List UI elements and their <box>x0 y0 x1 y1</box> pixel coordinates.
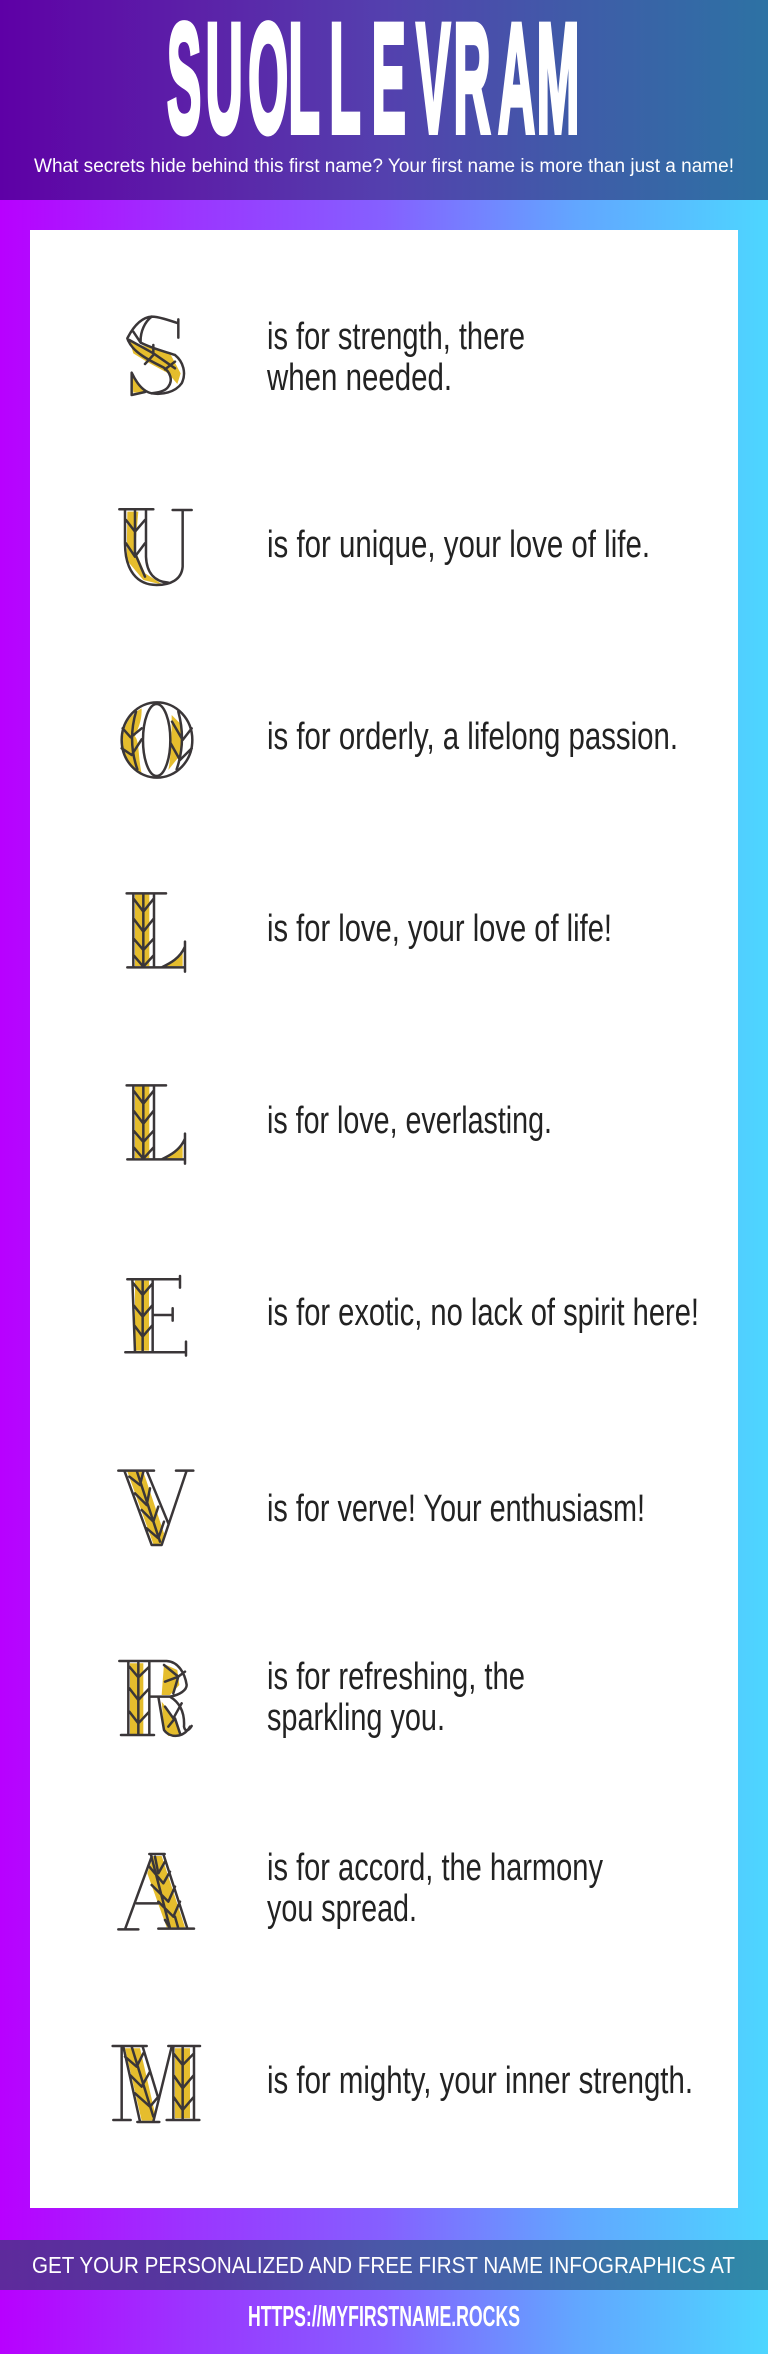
icon: letter E <box>125 1276 186 1356</box>
row: second L <box>127 1085 552 1164</box>
icon: letter U <box>119 509 192 585</box>
row: S <box>127 316 525 399</box>
subtitle: What secrets hide behind this first name? Your first name is more than just a name! <box>34 156 734 177</box>
text: U: is for unique, your love of life. <box>267 524 650 566</box>
row: L <box>127 893 612 972</box>
text: R line 2: sparkling you. <box>267 1697 445 1739</box>
text: second L: is for love, everlasting. <box>267 1100 552 1142</box>
icon: letter M <box>113 2046 200 2122</box>
footer URL: HTTPS://MYFIRSTNAME.ROCKS <box>248 2301 520 2333</box>
row: A <box>118 1847 603 1930</box>
text: R line 1: is for refreshing, the <box>267 1656 525 1698</box>
header band <box>0 0 768 200</box>
text: V: is for verve! Your enthusiasm! <box>267 1488 645 1530</box>
text: A line 2: you spread. <box>267 1888 417 1930</box>
icon: letter V <box>118 1471 193 1545</box>
icon: letter L <box>127 1085 185 1164</box>
white content panel <box>30 230 738 2208</box>
text: S line 1: is for strength, there <box>267 316 525 358</box>
row: M <box>113 2046 693 2122</box>
icon: letter A <box>118 1854 194 1929</box>
row: E <box>125 1276 699 1356</box>
text: S line 2: when needed. <box>266 357 452 399</box>
row: V <box>118 1471 645 1545</box>
icon: letter L <box>127 893 185 972</box>
text: A line 1: is for accord, the harmony <box>267 1847 603 1889</box>
footer band <box>0 2240 768 2290</box>
icon: letter O <box>122 702 192 778</box>
row: O <box>122 702 678 778</box>
row: U <box>119 509 650 585</box>
text: L: is for love, your love of life! <box>267 908 612 950</box>
icon: letter S <box>127 317 184 395</box>
icon: letter R <box>119 1661 192 1736</box>
row: R <box>119 1656 525 1739</box>
